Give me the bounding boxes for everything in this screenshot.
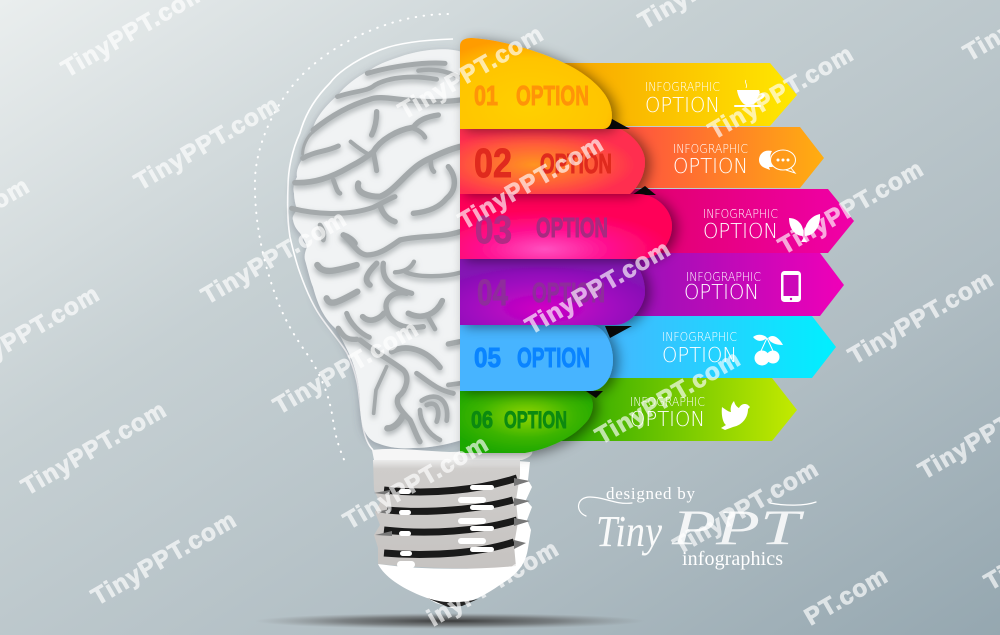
- designed by credit: [579, 484, 816, 570]
- icon: leaves: [789, 214, 820, 242]
- panel 2: [460, 129, 645, 194]
- arrow 2 text: [673, 141, 748, 178]
- watermarks: TinyPPT.com: [669, 455, 824, 560]
- icon: coffee cup: [734, 80, 765, 107]
- watermarks: TinyPPT.com: [394, 20, 549, 125]
- arrow 3 text: INFOGRAPHIC: [703, 206, 778, 221]
- arrow 1 text: INFOGRAPHIC: [645, 79, 720, 94]
- label 06: 06: [471, 407, 493, 434]
- watermarks: PT.com: [800, 562, 893, 631]
- watermarks: TinyPPT.com: [87, 506, 242, 611]
- arrow 6: [550, 378, 797, 441]
- socket highlights: [397, 485, 494, 568]
- panel 6: [460, 391, 593, 453]
- arrow 3 text: OPTION: [703, 219, 778, 243]
- arrow 4 text: OPTION: [684, 280, 759, 304]
- watermarks: TinyPPT.com: [704, 40, 859, 145]
- bulb outline: [288, 39, 453, 450]
- credit line top: designed by: [606, 484, 696, 503]
- panel 4: [460, 259, 645, 325]
- label option 6: OPTION: [504, 407, 567, 434]
- label option 4: OPTION: [532, 277, 605, 308]
- lamp socket: [372, 449, 532, 608]
- arrow 6 text: INFOGRAPHIC: [630, 394, 705, 409]
- credit swash: [579, 497, 816, 516]
- arrow 5 text: INFOGRAPHIC: [662, 329, 737, 344]
- watermarks: TinyPPT.com: [844, 265, 999, 370]
- arrow 6 text: [630, 394, 705, 431]
- arrow 3: [620, 189, 854, 253]
- arrow 1 text: [645, 79, 720, 117]
- arrow 2: [590, 127, 824, 188]
- icon: phone: [781, 271, 801, 302]
- socket white side: [440, 460, 532, 600]
- credit line bottom: infographics: [682, 548, 783, 570]
- arrow 3 text: [703, 206, 778, 243]
- watermarks: TinyPPT.com: [339, 430, 494, 535]
- arrow 6 text: OPTION: [630, 407, 705, 431]
- icon: bird: [721, 401, 750, 430]
- credit name PPT: PPT: [671, 499, 805, 555]
- arrow 4: [600, 253, 844, 316]
- watermarks: inyPPT.com: [423, 535, 564, 632]
- icon: chat bubbles: [759, 150, 796, 173]
- panel 5: [460, 325, 613, 391]
- floor shadow: [255, 613, 645, 629]
- label option 2: OPTION: [540, 148, 612, 179]
- arrow 5 text: [662, 329, 737, 367]
- panel 1: [460, 38, 612, 129]
- watermarks: TinyPPT.com: [454, 130, 609, 235]
- arrow 2 text: OPTION: [673, 154, 748, 178]
- label 05: 05: [474, 342, 501, 373]
- socket tip: [427, 598, 478, 607]
- panel 3: [460, 194, 672, 259]
- arrow 5: [580, 316, 836, 378]
- arrow 1: [560, 63, 797, 126]
- brain grooves upper: [292, 63, 460, 243]
- arrow 4 text: INFOGRAPHIC: [686, 269, 761, 284]
- brain silhouette: [293, 49, 462, 448]
- black gaps: [586, 119, 656, 398]
- label 02: 02: [474, 140, 512, 186]
- watermarks: TinyPPT.com: [17, 396, 172, 501]
- watermarks: TinyPPT.com: [591, 345, 746, 450]
- socket bottom cone: [378, 548, 527, 608]
- arrow 5 text: OPTION: [662, 343, 737, 367]
- socket black grooves: [384, 478, 517, 555]
- dotted arc: [255, 14, 448, 462]
- watermarks: TinyPPT.com: [269, 315, 424, 420]
- socket collar: [372, 449, 532, 460]
- credit name Tiny: Tiny: [596, 507, 662, 556]
- watermarks: TinyPPT.com: [774, 155, 929, 260]
- arrow 1 text: OPTION: [645, 93, 720, 117]
- socket grey threads: [373, 460, 520, 568]
- watermarks: TinyPPT.com: [197, 205, 352, 310]
- label option 3: OPTION: [536, 212, 608, 243]
- socket thread tips: [374, 478, 530, 549]
- label 03: 03: [475, 209, 512, 252]
- watermarks: TinyPPT.com: [521, 235, 676, 340]
- brain grooves lower: [317, 232, 460, 442]
- brain: [292, 49, 462, 448]
- watermarks: TinyPPT.com: [130, 91, 285, 196]
- label option 1: OPTION: [516, 80, 589, 111]
- arrow 2 text: INFOGRAPHIC: [673, 141, 748, 156]
- arrow 4 text: [684, 269, 761, 304]
- icon: cherries: [753, 335, 783, 366]
- label option 5: OPTION: [517, 342, 590, 373]
- label 01: 01: [474, 80, 498, 111]
- label 04: 04: [477, 272, 508, 313]
